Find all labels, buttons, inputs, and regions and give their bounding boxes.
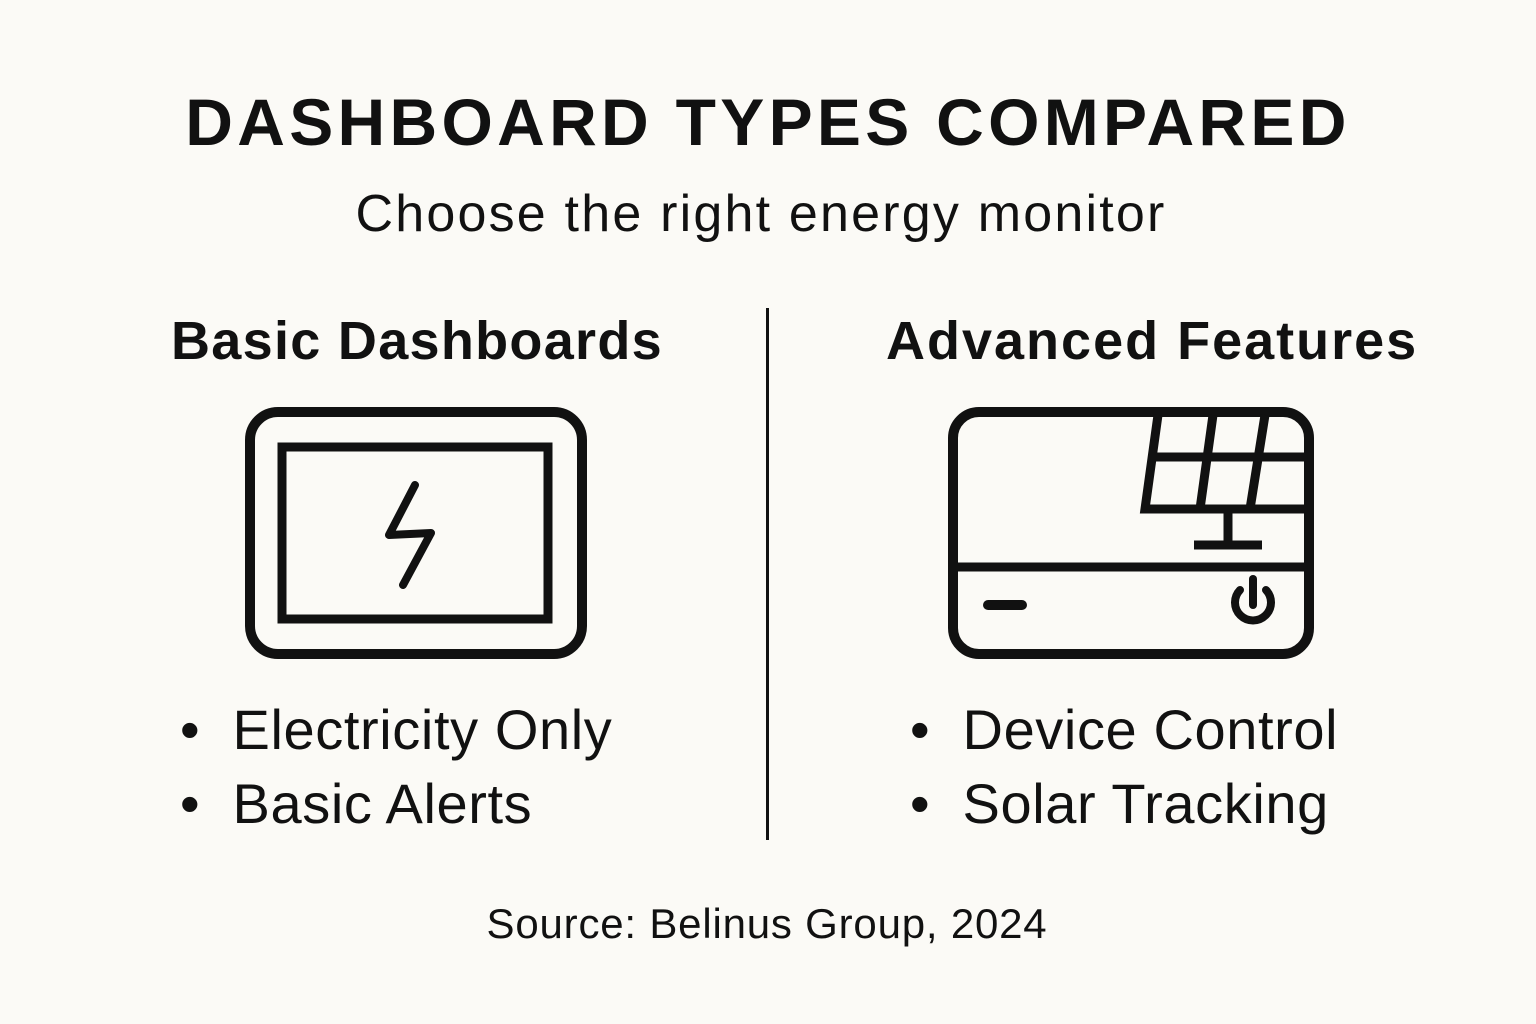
source: Source: Belinus Group, 2024 bbox=[487, 900, 1047, 947]
list: advanced: • Device Control bbox=[910, 698, 1338, 761]
subtitle: Choose the right energy monitor bbox=[355, 185, 1167, 243]
divider bbox=[766, 308, 769, 840]
list: basic bbox=[180, 698, 612, 835]
list: advanced bbox=[910, 698, 1338, 835]
panel: basic bbox=[171, 311, 663, 835]
heading: basic: Basic Dashboards bbox=[171, 311, 663, 371]
list: basic: • Electricity Only bbox=[180, 698, 612, 761]
list: advanced: • Solar Tracking bbox=[910, 772, 1329, 835]
heading: advanced: Advanced Features bbox=[886, 311, 1418, 371]
icon: tablet with bolt bbox=[245, 407, 587, 659]
panel: advanced bbox=[886, 311, 1418, 835]
list: basic: • Basic Alerts bbox=[180, 772, 532, 835]
title: DASHBOARD TYPES COMPARED bbox=[185, 85, 1351, 159]
icon: solar device bbox=[948, 407, 1314, 659]
